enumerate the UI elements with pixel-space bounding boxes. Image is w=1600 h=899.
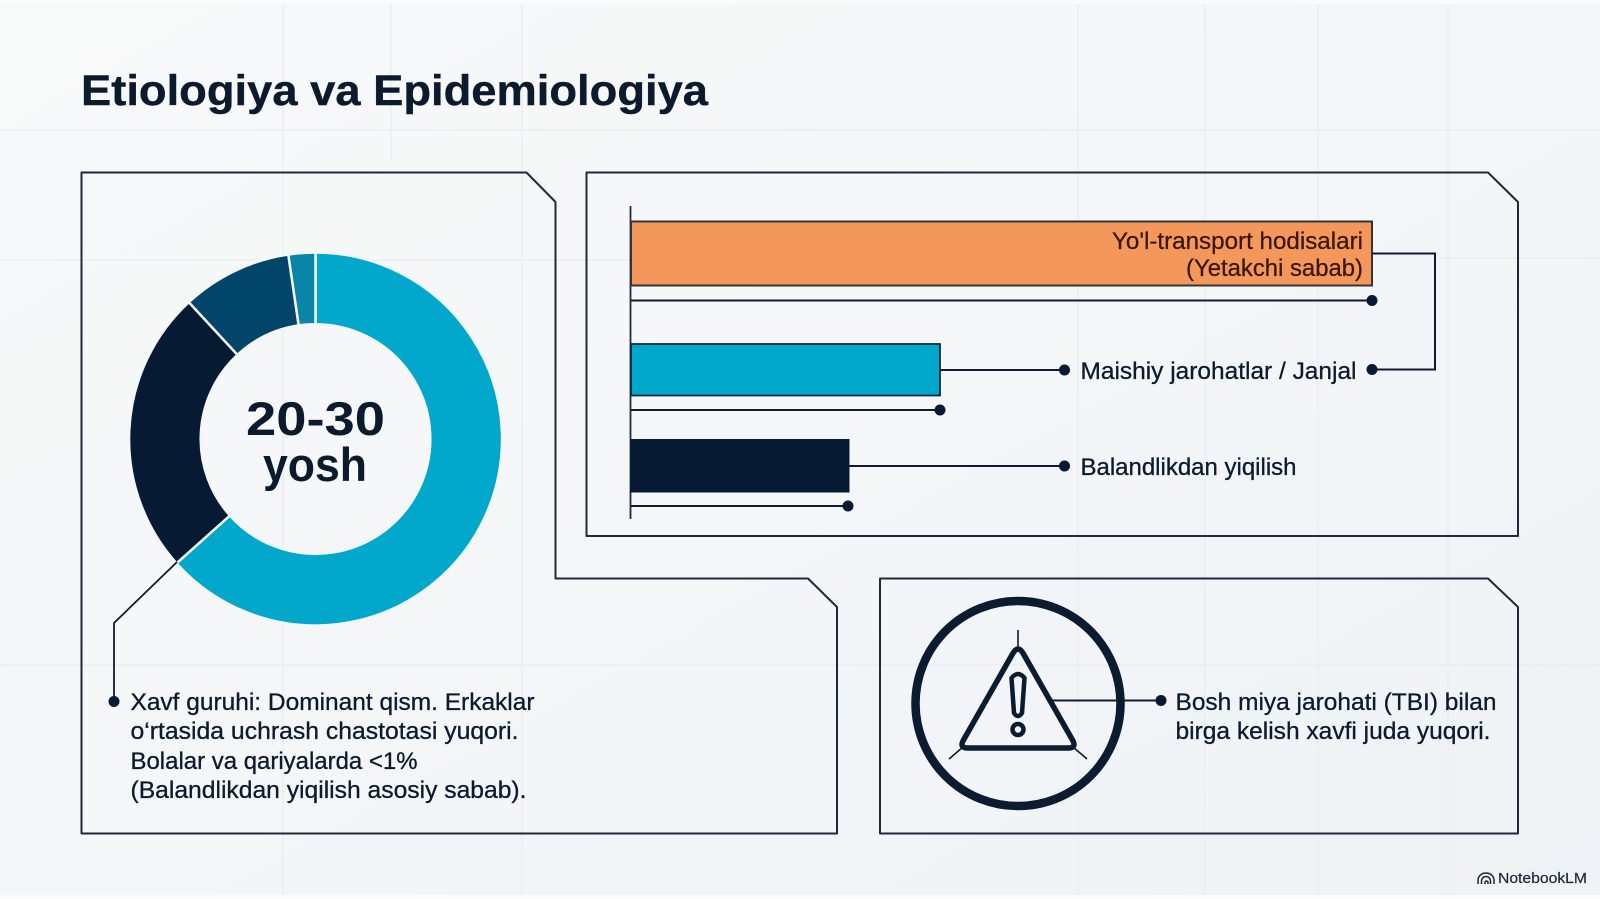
segment: teal [288,252,316,325]
panel outline [82,172,837,834]
bar: household injuries: Maishiy jarohatlar / Janjal [1080,358,1356,385]
panel outline [880,578,1518,834]
chart axis [630,206,632,519]
TBI risk text [1176,689,1496,745]
bar: falls from height [630,439,1296,512]
donut centre label [246,392,385,491]
donut centre label: yosh [263,438,367,491]
bar: road traffic accidents: (Yetakchi sabab) [1186,255,1363,282]
TBI risk text: Bosh miya jarohati (TBI) bilan [1176,689,1496,716]
callout text: risk group [130,689,535,804]
NotebookLM logo: NotebookLM [1498,870,1587,887]
bar: road traffic accidents: Yo'l-transport hodisalari [1112,228,1363,255]
title: Etiologiya va Epidemiologiya [81,67,709,115]
donut chart [129,252,502,626]
icon: warning triangle in circle [916,601,1120,806]
panel: TBI warning [880,578,1518,834]
callout text: risk group: Xavf guruhi: Dominant qism. Erkaklar [130,689,535,716]
bar: road traffic accidents [631,222,1378,306]
segment: dark blue [189,254,299,355]
connector: from top bar to second label [1366,254,1435,375]
leader line [1050,695,1166,706]
callout leader line [108,562,177,707]
bar: falls from height: Balandlikdan yiqilish [1080,454,1296,481]
panel outline [586,172,1518,536]
bar: household injuries [631,344,1356,416]
segment: navy [129,302,238,563]
callout text: risk group: Bolalar va qariyalarda <1% [130,748,418,775]
panel: age risk group [82,172,837,834]
donut centre label: 20-30 [246,392,385,445]
TBI risk text: birga kelish xavfi juda yuqori. [1176,718,1490,745]
panel: causes bar chart [586,172,1518,536]
callout text: risk group: o‘rtasida uchrash chastotasi yuqori. [130,718,518,745]
callout text: risk group: (Balandlikdan yiqilish asosiy sabab). [130,777,526,804]
segment: 20-30 age group [176,252,502,626]
